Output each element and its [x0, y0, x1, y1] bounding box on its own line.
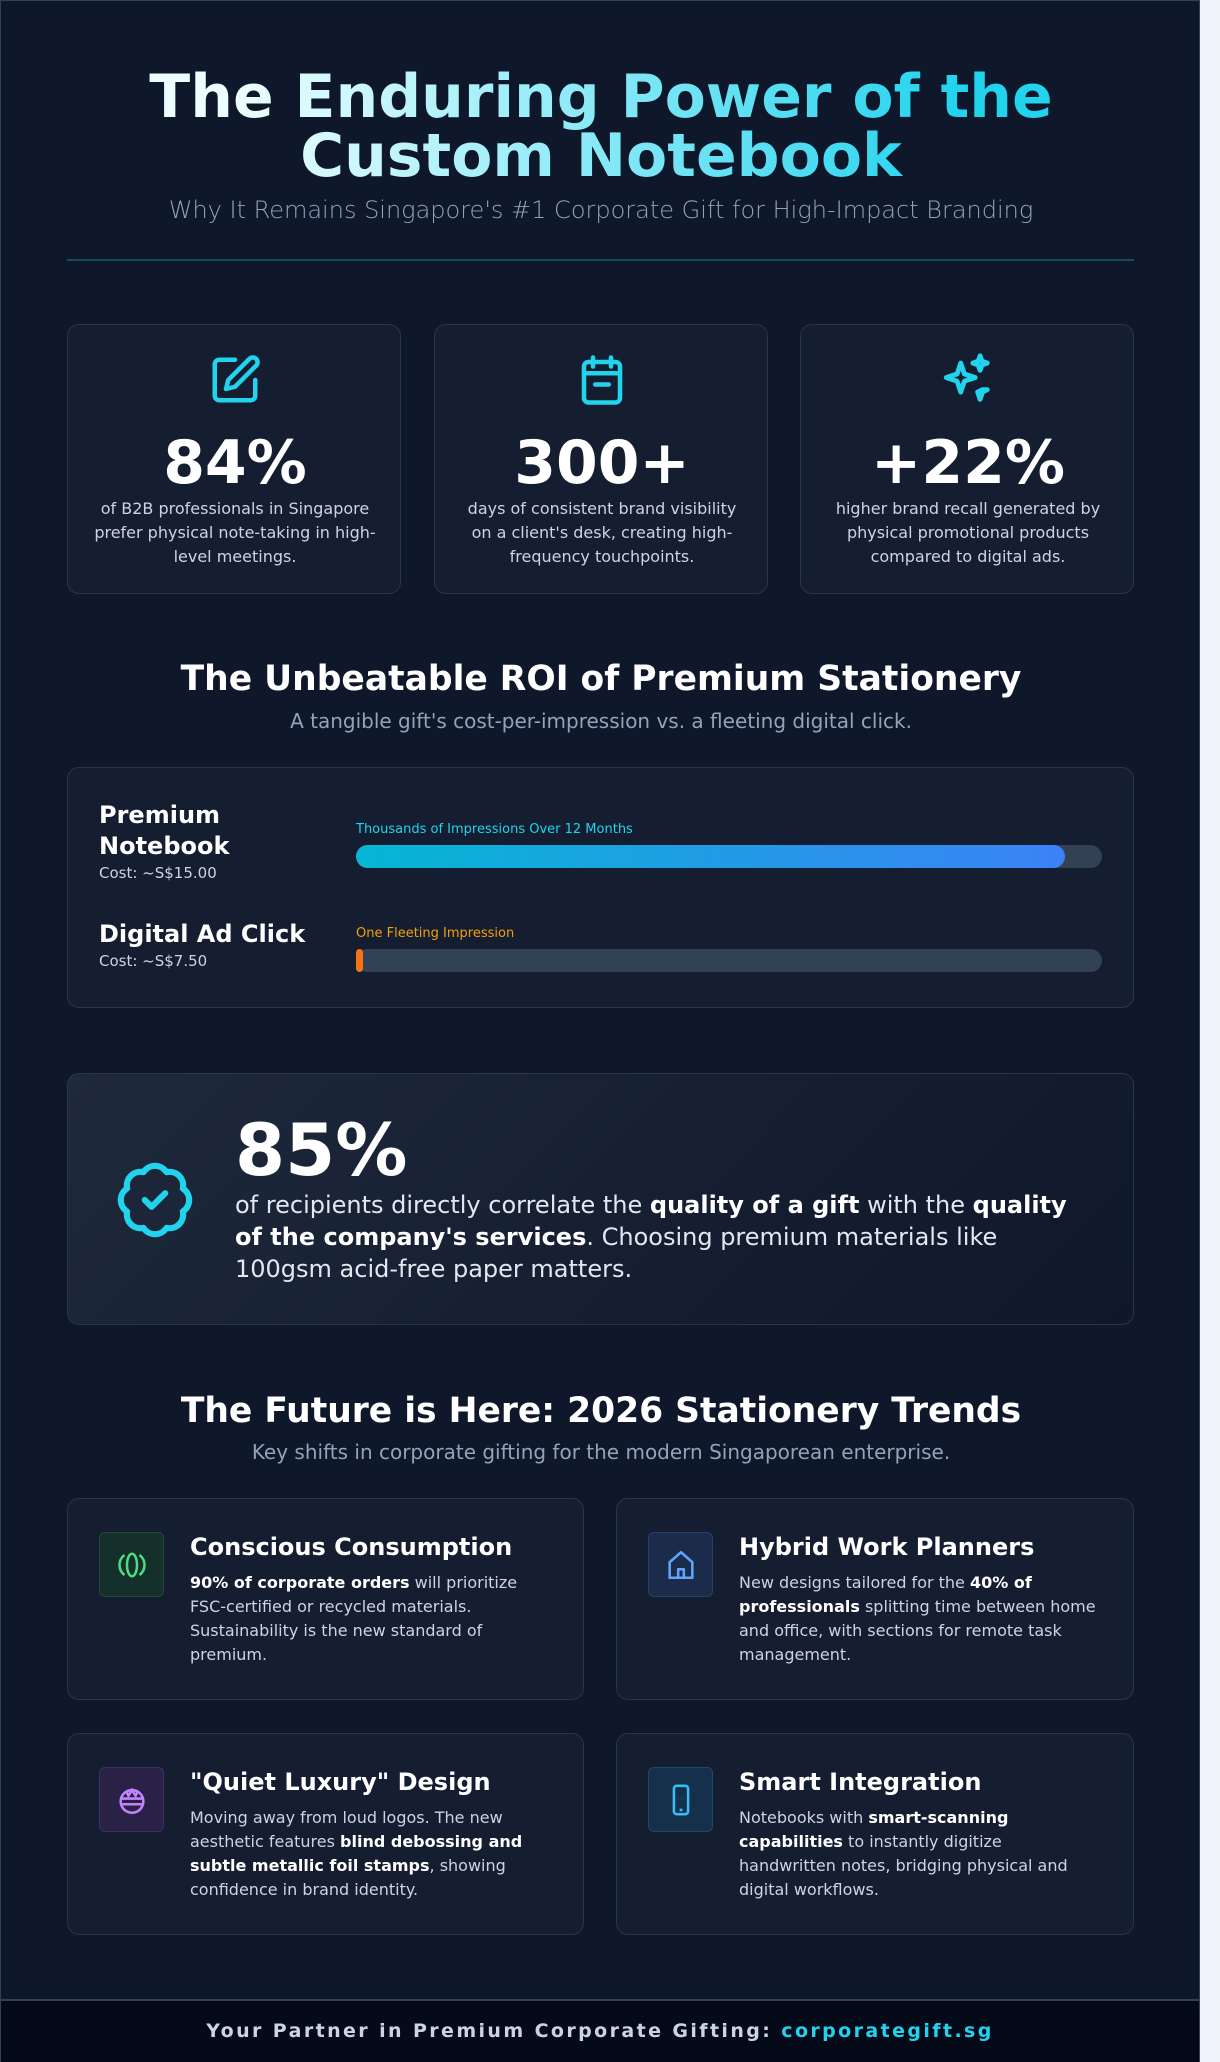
trend card: smart integration: Notebooks with smart-scanning capabilities to instantly digitize handwritten notes, bridging physical and digital workflows. — [739, 1808, 1068, 1899]
title: The Enduring Power of the — [149, 62, 1053, 132]
icon: sparkles — [944, 353, 990, 402]
trend card: hybrid work: New designs tailored for the 40% of professionals splitting time between home and office, with sections for remote task management. — [739, 1573, 1096, 1664]
label: digital ad — [99, 920, 306, 970]
trend card: hybrid work — [616, 1498, 1134, 1700]
icon: home — [648, 1532, 713, 1597]
label: digital ad: Cost: ~S$7.50 — [99, 952, 207, 970]
icon: leaf — [99, 1532, 164, 1597]
trend card: quiet luxury: "Quiet Luxury" Design — [190, 1768, 491, 1796]
trend card: conscious consumption: Conscious Consumption — [190, 1533, 512, 1561]
heading: ROI: The Unbeatable ROI of Premium Stationery — [181, 659, 1021, 699]
bar: digital: One Fleeting Impression — [356, 926, 514, 941]
trend card: conscious consumption — [67, 1498, 584, 1700]
stat card: 84%: 84% — [163, 428, 307, 498]
footer — [1, 1999, 1199, 2062]
stat card: 300+: 300+ — [514, 428, 690, 498]
trend card: quiet luxury — [67, 1733, 584, 1935]
bar: notebook — [356, 822, 1102, 868]
stat card: 300+ — [434, 324, 768, 594]
stat card: 300+: days of consistent brand visibility on a client's desk, creating high-frequency touchpoints. — [468, 499, 736, 566]
label: premium notebook — [99, 801, 230, 882]
callout: 85%: 85% — [235, 1108, 407, 1192]
trends subtitle: Key shifts in corporate gifting for the modern Singaporean enterprise. — [252, 1440, 950, 1464]
trend card: hybrid work: Hybrid Work Planners — [739, 1533, 1034, 1561]
title: Custom Notebook — [300, 121, 902, 191]
title — [1, 68, 1201, 186]
stat card: 84% — [67, 324, 401, 594]
stat card: 84%: of B2B professionals in Singapore prefer physical note-taking in high-level meetings. — [94, 499, 376, 566]
icon: badge check — [118, 1162, 192, 1238]
heading: trends: The Future is Here: 2026 Stationery Trends — [181, 1391, 1021, 1431]
icon: crown — [99, 1767, 164, 1832]
icon: pen — [212, 355, 260, 402]
label: premium notebook: Premium — [99, 801, 220, 829]
icon: calendar — [582, 355, 622, 405]
stat card: +22% — [800, 324, 1134, 594]
bar: digital — [356, 926, 1102, 972]
callout: 85%: of recipients directly correlate the quality of a gift with the quality of the company's services. Choosing premium materials like 100gsm acid-free paper matters. — [235, 1191, 1067, 1283]
footer: Your Partner in Premium Corporate Gifting: corporategift.sg — [206, 2020, 994, 2042]
ROI subtitle: A tangible gift's cost-per-impression vs. a fleeting digital click. — [290, 709, 912, 733]
label: premium notebook: Notebook — [99, 832, 229, 860]
bar: notebook: Thousands of Impressions Over 12 Months — [356, 822, 633, 837]
trend card: smart integration — [616, 1733, 1134, 1935]
icon: phone — [648, 1767, 713, 1832]
stat card: +22%: higher brand recall generated by physical promotional products compared to digital ads. — [836, 499, 1100, 566]
trend card: conscious consumption: 90% of corporate orders will prioritize FSC-certified or recycled materials. Sustainability is the new standard of premium. — [190, 1573, 517, 1664]
stat card: +22%: +22% — [871, 428, 1065, 498]
trend card: quiet luxury: Moving away from loud logos. The new aesthetic features blind debossing and subtle metallic foil stamps, showing confidence in brand identity. — [190, 1808, 522, 1899]
label: premium notebook: Cost: ~S$15.00 — [99, 864, 217, 882]
callout: 85% — [67, 1073, 1134, 1325]
label: digital ad: Digital Ad Click — [99, 920, 305, 948]
trend card: smart integration: Smart Integration — [739, 1768, 981, 1796]
subtitle: Why It Remains Singapore's #1 Corporate Gift for High-Impact Branding — [169, 196, 1033, 224]
panel: ROI bars — [67, 767, 1134, 1008]
